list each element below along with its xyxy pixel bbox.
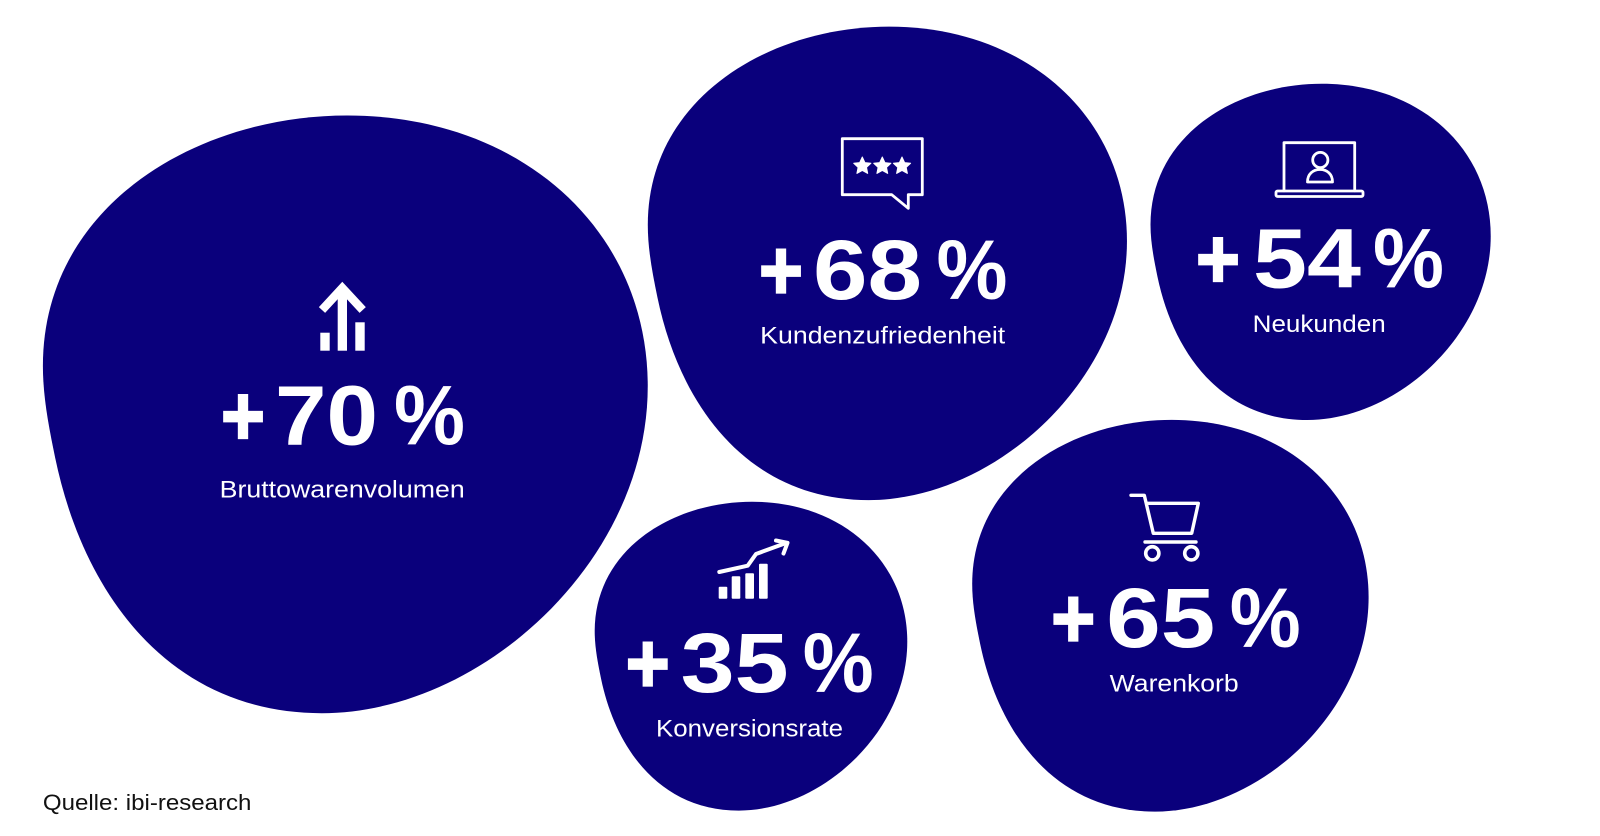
value: +70 %: +	[221, 368, 265, 462]
panel: Kundenzufriedenheit	[648, 27, 1127, 500]
source note: Quelle: ibi-research	[43, 790, 251, 815]
label: Neukunden: Neukunden	[1253, 311, 1386, 338]
icon: speech bubble with stars	[842, 139, 922, 208]
icon: shopping cart	[1131, 495, 1198, 560]
panel: Neukunden	[1150, 84, 1491, 420]
value: +68 %: %	[936, 223, 1008, 317]
value: +68 %: +	[759, 223, 803, 317]
panel: Konversionsrate	[595, 502, 907, 811]
icon: rising chart	[719, 540, 788, 599]
value: +35 %: +	[626, 616, 670, 710]
value: +54 %: 54	[1253, 212, 1361, 306]
label: Kundenzufriedenheit: Kundenzufriedenheit	[760, 322, 1006, 349]
blob: Neukunden	[1150, 84, 1491, 420]
label: Bruttowarenvolumen: Bruttowarenvolumen	[220, 476, 465, 503]
value: +65 %: %	[1230, 571, 1301, 665]
blob: Bruttowarenvolumen	[43, 116, 648, 713]
value: +35 %	[626, 616, 874, 710]
value: +68 %	[759, 223, 1008, 317]
value: +65 %	[1051, 571, 1301, 665]
label: Konversionsrate: Konversionsrate	[656, 716, 843, 743]
value: +70 %: 70	[275, 368, 378, 462]
panel: Warenkorb	[972, 420, 1369, 812]
value: +54 %: +	[1196, 212, 1240, 306]
value: +35 %: 35	[681, 616, 789, 710]
value: +54 %	[1196, 212, 1444, 306]
value: +54 %: %	[1373, 212, 1444, 306]
value: +65 %: 65	[1106, 571, 1215, 665]
value: +70 %	[221, 368, 465, 462]
value: +35 %: %	[803, 616, 874, 710]
icon: laptop with person	[1276, 143, 1363, 196]
blob: Kundenzufriedenheit	[648, 27, 1127, 500]
icon: arrow with bars	[320, 288, 365, 351]
label: Warenkorb: Warenkorb	[1110, 671, 1239, 698]
panel: Bruttowarenvolumen	[43, 116, 648, 713]
value: +65 %: +	[1051, 571, 1095, 665]
value: +68 %: 68	[813, 223, 922, 317]
blob: Konversionsrate	[595, 502, 907, 811]
value: +70 %: %	[394, 368, 465, 462]
blob: Warenkorb	[972, 420, 1369, 812]
